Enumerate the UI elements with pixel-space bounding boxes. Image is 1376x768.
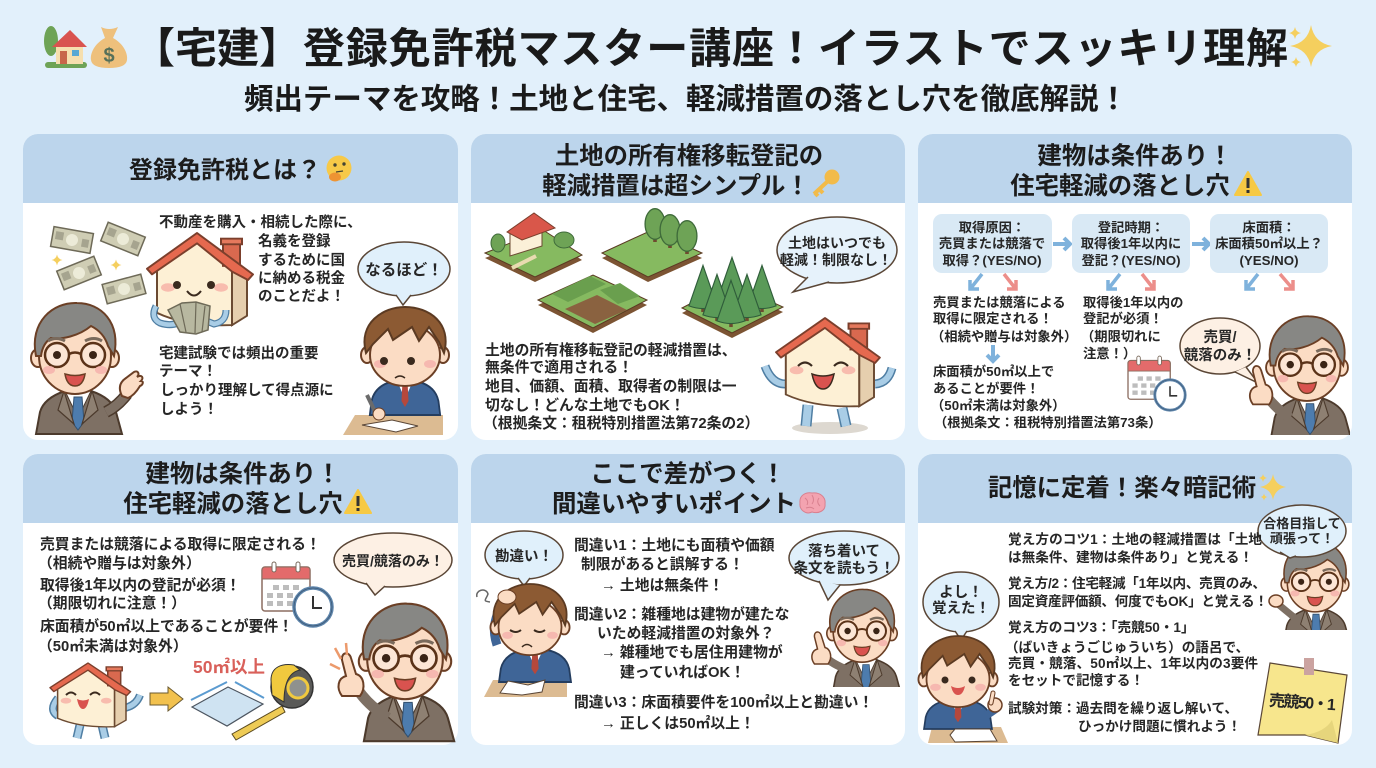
body text: 間違い3：床面積要件を100㎡以上と勘違い！ (574, 693, 873, 711)
panel header (471, 454, 905, 523)
text: 床面積要件: （50㎡未満は対象外） (931, 397, 1065, 413)
icon: calendar and clock (262, 562, 332, 626)
body text: definition: に納める税金 (258, 269, 345, 287)
subtitle: 頻出テーマを攻略！土地と住宅、軽減措置の落とし穴を徹底解説！ (244, 83, 1128, 116)
panel card (23, 134, 458, 440)
area diagram (191, 682, 264, 726)
speech bubble: よし覚えた (923, 572, 999, 640)
text: 床面積要件: 床面積が50㎡以上で (933, 363, 1054, 379)
speech bubble: 売買/競落のみ: 売買/ (1203, 329, 1237, 346)
panel header (23, 134, 458, 203)
speech bubble: 土地はいつでも: 土地はいつでも (788, 235, 886, 251)
body text: importance: しよう！ (160, 401, 218, 418)
speech bubble: 勘違い: 勘違い！ (495, 547, 553, 565)
arrow (1053, 238, 1070, 250)
panel: 土地の軽減措置 (471, 134, 905, 440)
text: 取得後1年以内: 取得後1年以内の (1083, 294, 1183, 310)
speech bubble: 落ち着いて (789, 531, 899, 600)
body text (38, 536, 321, 655)
speech bubble: なるほど (358, 242, 450, 305)
flow box: 取得原因: 取得？(YES/NO) (942, 253, 1042, 268)
body text: 試験対策：過去問を繰り返し解いて、 (1008, 700, 1238, 716)
body text: → 正しくは50㎡以上！ (601, 714, 755, 732)
body text: ひっかけ問題に慣れよう！ (1078, 718, 1241, 734)
body text: 間違い2：雑種地は建物が建たな (574, 605, 790, 623)
speech bubble: よし覚えた: 覚えた！ (932, 600, 990, 617)
land plot: grass with trees (602, 209, 702, 282)
body text: 床面積が50㎡以上であることが要件！ (40, 617, 293, 635)
speech bubble: 合格目指して (1258, 505, 1346, 558)
body text: 土地の所有権移転登記の軽減措置は、 (485, 341, 737, 359)
panel: 建物は条件あり フローチャート (918, 134, 1352, 440)
body text: → 土地は無条件！ (601, 577, 724, 594)
teacher character waving (1268, 548, 1350, 630)
heading (542, 143, 823, 200)
body text: importance: しっかり理解して得点源に (160, 381, 334, 399)
main title: 【宅建】 (133, 25, 301, 72)
panel card (918, 134, 1352, 440)
body text: （根拠条文：租税特別措置法第72条の2） (483, 414, 759, 432)
body text: 覚え方/2：住宅軽減「1年以内、売買のみ、 (1008, 575, 1266, 591)
body text: definition: 不動産を購入・相続した際に、 (159, 213, 362, 231)
house character waving (50, 663, 140, 738)
teacher character pointing (330, 604, 454, 741)
body text: をセットで記憶する！ (1008, 672, 1144, 688)
panel header (471, 134, 905, 203)
speech bubble: 合格目指して: 合格目指して (1263, 516, 1341, 531)
icon: warning (345, 490, 371, 513)
panel: 建物は条件あり 要件 (23, 454, 458, 745)
speech bubble: 売買/競落のみ (1180, 318, 1260, 383)
text: 床面積要件: あることが要件！ (933, 380, 1039, 396)
heading: ここで差がつく！ (590, 460, 786, 488)
heading (552, 460, 796, 518)
body text: importance: 宅建試験では頻出の重要 (159, 345, 318, 362)
icon: money bag (91, 27, 127, 68)
text: 床面積要件: （根拠条文：租税特別措置法第73条） (934, 414, 1162, 430)
body text: importance (159, 345, 334, 418)
text: 取得後1年以内: （期限切れに (1081, 329, 1161, 344)
heading: 軽減措置は超シンプル！ (542, 173, 810, 200)
heading: 記憶に定着！楽々暗記術 (988, 475, 1256, 502)
icon: house with trees (44, 26, 87, 68)
body text: 間違い1：土地にも面積や価額 (574, 536, 775, 554)
body text: definition: のことだよ！ (258, 288, 345, 305)
heading: 登録免許税とは？ (129, 157, 321, 184)
speech bubble: 売買/競落のみ: 売買/競落のみ！ (342, 553, 444, 569)
panel card (918, 454, 1352, 745)
flow box: 床面積 (1210, 214, 1328, 273)
heading: 住宅軽減の落とし穴 (123, 491, 343, 518)
body text (1005, 531, 1268, 734)
icon: sparkles (1259, 474, 1286, 500)
body text: definition: するために国 (258, 252, 345, 269)
speech bubble: よし覚えた: よし！ (939, 584, 983, 601)
icon: thinking face (326, 156, 352, 182)
flow box: 取得原因: 取得原因： (959, 220, 1025, 235)
land plot: forest (682, 257, 783, 338)
speech bubble: 売買/競落のみ (334, 533, 452, 595)
flow box: 登記時期 (1072, 214, 1190, 273)
speech bubble: 合格目指して: 頑張って！ (1270, 531, 1334, 546)
body text: 地目、価額、面積、取得者の制限は一 (485, 377, 737, 395)
body text: （ばいきょうごじゅういち）の語呂で、 (1005, 639, 1249, 655)
teacher character pointing (812, 589, 901, 694)
body text: 建っていればOK！ (620, 664, 745, 681)
body text: 覚え方のコツ1：土地の軽減措置は「土地 (1008, 531, 1262, 547)
body text: 制限があると誤解する！ (581, 555, 744, 573)
heading: 住宅軽減の落とし穴 (1010, 173, 1230, 200)
heading: 土地の所有権移転登記の (555, 143, 823, 170)
land plot: house lot (485, 213, 582, 282)
body text: は無条件、建物は条件あり」と覚える！ (1008, 549, 1253, 565)
speech bubble: 勘違い (485, 531, 563, 586)
flow box: 登記時期: 登記時期： (1098, 219, 1164, 235)
flow box: 登記時期: 取得後1年以内に (1081, 235, 1181, 251)
text: 売買または競落: 売買または競落による (933, 294, 1066, 310)
icon: calendar and clock (1128, 356, 1185, 410)
student with thumbs up (918, 636, 1008, 743)
text: 取得後1年以内: 登記が必須！ (1083, 310, 1163, 326)
body text: 売買・競落、50㎡以上、1年以内の3要件 (1008, 655, 1258, 671)
icon: brain (800, 493, 825, 513)
flow box: 床面積: (YES/NO) (1239, 253, 1299, 268)
text: 売買または競落 (931, 294, 1077, 344)
arrow (1192, 238, 1209, 250)
text: 取得後1年以内 (1081, 294, 1183, 361)
flow box: 登記時期: 登記？(YES/NO) (1082, 253, 1180, 268)
speech bubble: 土地はいつでも (777, 217, 897, 292)
icon: money bag: $ (103, 45, 115, 67)
sticky note (1258, 658, 1347, 743)
money bills (51, 222, 146, 304)
heading: 建物は条件あり！ (145, 461, 341, 488)
panel header (918, 454, 1352, 523)
body text: 切なし！どんな土地でもOK！ (485, 397, 685, 414)
text: 売買または競落: 取得に限定される！ (933, 311, 1053, 326)
body text: （期限切れに注意！） (38, 594, 186, 612)
panel: 登録免許税とは (23, 134, 458, 440)
body text: 取得後1年以内の登記が必須！ (40, 576, 241, 594)
flow box: 床面積: 床面積： (1242, 219, 1296, 235)
panel card (471, 454, 905, 745)
speech bubble: 落ち着いて: 条文を読もう！ (793, 559, 895, 577)
student character writing (343, 307, 449, 435)
teacher character (31, 303, 143, 434)
panel header (918, 134, 1352, 203)
land plot: farm field (538, 275, 647, 333)
speech bubble: 売買/競落のみ: 競落のみ！ (1184, 347, 1256, 364)
body text: definition (159, 213, 362, 305)
happy house character (765, 318, 892, 434)
body text: 固定資産評価額、何度でもOK」と覚える！ (1008, 593, 1268, 609)
title block (44, 25, 1332, 116)
body text: 無条件で適用される！ (485, 358, 633, 376)
label: 50㎡以上: 50㎡以上 (193, 657, 265, 677)
flow box: 床面積: 床面積50㎡以上？ (1215, 235, 1323, 251)
icon: warning (1235, 172, 1261, 195)
heading (1010, 143, 1233, 200)
flow box: 取得原因 (933, 214, 1052, 273)
body text: いため軽減措置の対象外？ (597, 624, 775, 642)
panel: 楽々暗記術 (918, 454, 1352, 745)
body text: → 雑種地でも居住用建物が (601, 643, 783, 661)
body text (483, 341, 759, 432)
icon: key (814, 170, 840, 196)
sticky note: 売競50・1 (1268, 692, 1337, 714)
speech bubble: 落ち着いて: 落ち着いて (808, 542, 880, 560)
speech bubble: 土地はいつでも: 軽減！制限なし！ (780, 252, 892, 268)
heading: 建物は条件あり！ (1037, 143, 1233, 170)
arrow: yellow (150, 687, 183, 711)
main title: 登録免許税マスター講座！イラストでスッキリ理解 (303, 25, 1288, 72)
panel: 間違いやすいポイント (471, 454, 905, 745)
body text: （50㎡未満は対象外） (38, 637, 188, 655)
body text: 売買または競落による取得に限定される！ (40, 536, 321, 553)
worried student at desk (477, 584, 571, 697)
yes/no arrows (970, 274, 1293, 289)
text: 床面積要件 (931, 363, 1162, 430)
body text (574, 536, 873, 732)
house character with money (147, 233, 253, 334)
body text: 覚え方のコツ3：「売競50・1」 (1008, 619, 1195, 635)
body text: definition: 名義を登録 (258, 232, 331, 250)
tape measure (232, 665, 313, 740)
speech bubble: なるほど: なるほど！ (365, 261, 443, 279)
panel card (23, 454, 458, 745)
arrow down (987, 345, 999, 361)
heading (123, 461, 343, 518)
panel header (23, 454, 458, 523)
text: 売買または競落: （相続や贈与は対象外） (931, 328, 1077, 344)
heading: 間違いやすいポイント (552, 491, 796, 518)
body text: importance: テーマ！ (159, 364, 217, 380)
panel card (471, 134, 905, 440)
icon: sparkles (1289, 25, 1332, 67)
text: 取得後1年以内: 注意！） (1083, 345, 1136, 361)
teacher character pointing (1250, 316, 1351, 438)
flow box: 取得原因: 売買または競落で (939, 235, 1045, 251)
body text: （相続や贈与は対象外） (38, 554, 201, 572)
